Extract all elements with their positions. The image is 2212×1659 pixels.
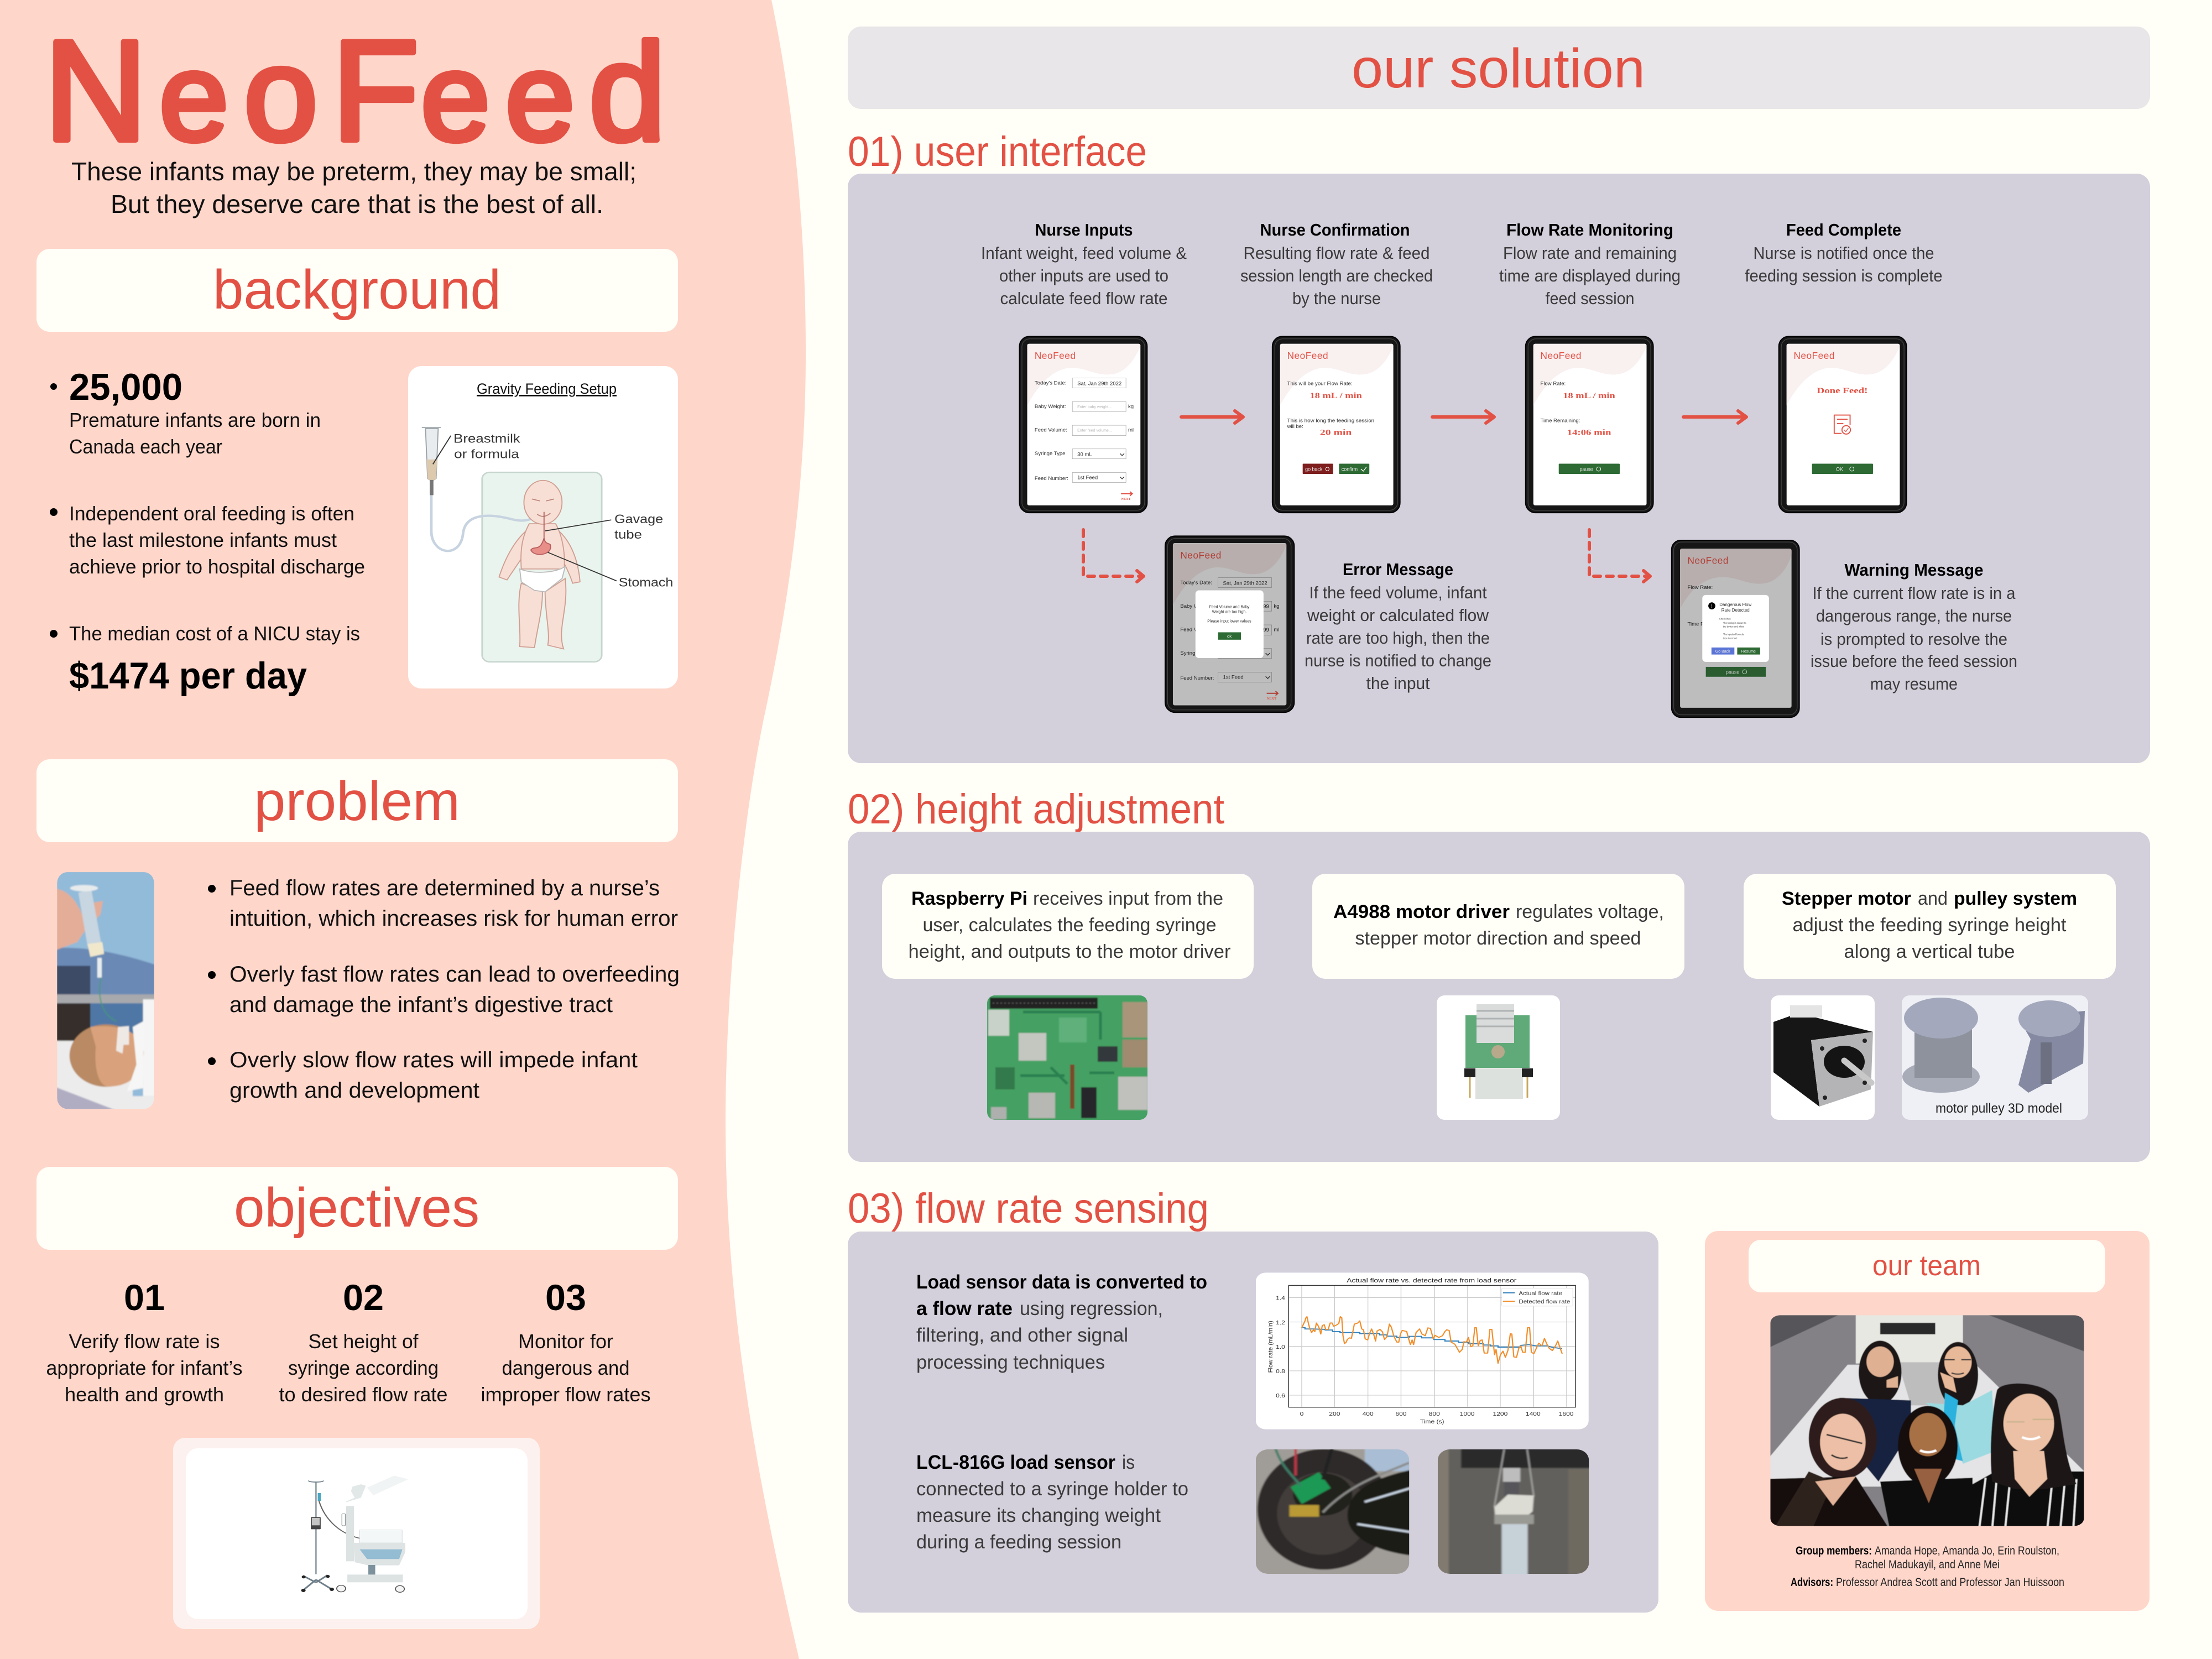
text: load sensor data xyxy=(916,1271,1207,1373)
panel: background bullets: Independent oral feeding is often xyxy=(69,502,354,525)
tablet: warning message: Go Back xyxy=(1715,650,1730,654)
tablet: nurse inputs: 30 mL xyxy=(1077,452,1092,458)
photo: syringe holder xyxy=(1434,1446,1592,1577)
panel: gravity feeding setup diagram: Gavage xyxy=(614,513,663,526)
card: raspberry pi: height, and outputs to the motor driver xyxy=(908,941,1231,962)
text: warning message: is prompted to resolve the xyxy=(1820,629,2007,649)
chart: actual vs detected flow rate xyxy=(1256,1272,1589,1430)
tablet: error message: Feed Volume and Baby xyxy=(1209,605,1250,609)
text: load sensor hardware: LCL-816G load sensor xyxy=(916,1452,1115,1473)
title: NeoFeed: N xyxy=(44,11,147,170)
tablet: error message: Today's Date: xyxy=(1180,580,1212,586)
card: motor driver xyxy=(1312,874,1684,979)
text: error message: weight or calculated flow xyxy=(1307,606,1489,625)
chart: actual vs detected flow rate: 1000 xyxy=(1460,1411,1475,1417)
panel: gravity feeding setup diagram: Breastmilk xyxy=(453,432,520,446)
image: motor pulley 3D model: motor pulley 3D model xyxy=(1936,1101,2062,1116)
step text: nurse inputs: other inputs are used to xyxy=(999,266,1168,285)
tablet: error message: 99 xyxy=(1263,603,1269,609)
text: load sensor data: filtering, and other signal xyxy=(916,1324,1128,1346)
tablet: error message: ml xyxy=(1274,627,1279,633)
panel: problem bullets: Overly slow flow rates will impede infant xyxy=(229,1048,638,1072)
arrow: monitoring to complete xyxy=(1683,411,1746,423)
tablet: error message: Baby W xyxy=(1180,603,1199,609)
tablet: nurse confirmation: will be: xyxy=(1287,424,1303,430)
panel: background bullets xyxy=(50,366,365,697)
tablet: warning message: The inputted formula xyxy=(1723,633,1744,636)
tablet: error message: Feed Number: xyxy=(1180,675,1214,681)
tablet: error message: ok xyxy=(1227,634,1232,639)
text: load sensor hardware: during a feeding session xyxy=(916,1531,1121,1553)
objective 03: 03 xyxy=(545,1277,586,1318)
chart: actual vs detected flow rate: 800 xyxy=(1429,1411,1440,1417)
title: NeoFeed: o xyxy=(244,20,317,168)
tablet: feed complete: NeoFeed xyxy=(1793,350,1834,361)
step text: nurse inputs: Infant weight, feed volume & xyxy=(981,243,1187,263)
objective 03: dangerous and xyxy=(502,1357,629,1379)
chart: actual vs detected flow rate: Time (s) xyxy=(1420,1419,1444,1425)
objective 03: Monitor for xyxy=(518,1330,613,1353)
tablet: warning message: NeoFeed xyxy=(1687,555,1728,566)
tablet: nurse inputs xyxy=(1020,336,1147,513)
tablet: nurse confirmation: This is how long the feeding session xyxy=(1287,418,1374,424)
arrow: confirmation to monitoring xyxy=(1432,411,1494,423)
arrow: inputs to confirmation xyxy=(1181,411,1243,423)
text: warning message: Warning Message xyxy=(1845,560,1983,580)
step text: flow rate monitoring: feed session xyxy=(1545,289,1635,308)
tablet: error message: 99 xyxy=(1263,627,1269,633)
tablet: nurse confirmation: This will be your Flow Rate: xyxy=(1287,380,1353,387)
objective 02 xyxy=(279,1277,448,1406)
objective 01: 01 xyxy=(124,1277,165,1318)
card: stepper motor: Stepper motor xyxy=(1782,888,1911,909)
objective 01: health and growth xyxy=(65,1383,224,1406)
tablet: nurse inputs: Today's Date: xyxy=(1035,380,1066,387)
text: warning message: issue before the feed session xyxy=(1811,651,2017,671)
text: credits: Amanda Hope, Amanda Jo, Erin Roulston, xyxy=(1875,1545,2059,1557)
tablet: warning message: type is correct xyxy=(1723,637,1738,640)
card: stepper motor: pulley system xyxy=(1954,888,2077,909)
text: error message: nurse is notified to change xyxy=(1305,651,1491,670)
tablet: error message: Feed V xyxy=(1180,627,1198,633)
card: motor driver: regulates voltage, xyxy=(1516,901,1664,922)
tagline xyxy=(71,157,637,218)
text: credits: Rachel Madukayil, and Anne Mei xyxy=(1855,1558,2000,1571)
step text: flow rate monitoring: Flow Rate Monitoring xyxy=(1506,220,1673,239)
tablet: warning message: Rate Detected xyxy=(1721,608,1750,613)
panel: background bullets: Premature infants are born in xyxy=(69,409,321,431)
tablet: error message: Syring xyxy=(1180,650,1195,656)
objective 01: appropriate for infant’s xyxy=(46,1357,242,1379)
text: load sensor hardware: measure its changing weight xyxy=(916,1505,1161,1526)
panel: gravity feeding setup diagram: Stomach xyxy=(619,576,673,589)
tablet: feed complete: Done Feed! xyxy=(1817,387,1867,395)
tablet: flow rate monitoring xyxy=(1526,336,1653,513)
tablet: nurse confirmation xyxy=(1272,336,1400,513)
step text: nurse confirmation: session length are checked xyxy=(1240,266,1433,285)
tablet: flow rate monitoring: 14:06 min xyxy=(1567,428,1611,437)
tablet: error message: Please input lower values xyxy=(1207,620,1251,624)
subheading: 02 height adjustment: 02) height adjustment xyxy=(848,786,1224,833)
panel: gravity feeding setup diagram: or formula xyxy=(454,447,520,461)
panel: gravity feeding setup diagram: Gravity Feeding Setup xyxy=(477,380,617,397)
panel: gravity feeding setup diagram xyxy=(408,366,678,688)
card: stepper motor: adjust the feeding syringe height xyxy=(1793,915,2067,936)
chart: actual vs detected flow rate: 600 xyxy=(1395,1411,1407,1417)
panel: background bullets: achieve prior to hospital discharge xyxy=(69,555,365,578)
tablet: nurse inputs: kg xyxy=(1128,404,1134,410)
panel: background bullets: the last milestone infants must xyxy=(69,529,337,551)
tablet: feed complete: OK xyxy=(1836,466,1843,472)
tablet: nurse confirmation: go back xyxy=(1305,466,1323,472)
card: stepper motor xyxy=(1744,874,2116,979)
step text: nurse confirmation: by the nurse xyxy=(1292,289,1381,308)
step text: nurse inputs: calculate feed flow rate xyxy=(1000,289,1168,308)
objective 02: 02 xyxy=(343,1277,384,1318)
tablet: error message: NeoFeed xyxy=(1180,550,1221,561)
tablet: nurse confirmation: 20 min xyxy=(1320,428,1352,437)
heading: our team: our team xyxy=(1872,1250,1981,1282)
tablet: warning message: The tubing is secure to xyxy=(1723,622,1746,624)
dashed arrow: to error message xyxy=(1083,530,1144,582)
tablet: error message: Weight are too high. xyxy=(1212,610,1246,614)
tablet: error message: kg xyxy=(1274,603,1279,609)
tablet: warning message: Dangerous Flow xyxy=(1719,602,1751,607)
text: credits xyxy=(1791,1545,2064,1589)
panel: problem bullets: growth and development xyxy=(229,1078,479,1103)
step text: feed complete: feeding session is complete xyxy=(1745,266,1942,285)
card: raspberry pi xyxy=(882,874,1254,979)
step text: nurse confirmation xyxy=(1240,220,1433,308)
text: error message: If the feed volume, infant xyxy=(1310,583,1487,602)
chart: actual vs detected flow rate: 0.6 xyxy=(1276,1393,1285,1399)
title: NeoFeed: F xyxy=(332,11,419,170)
image: stepper motor xyxy=(1771,995,1875,1120)
chart: actual vs detected flow rate: 0 xyxy=(1300,1411,1303,1417)
heading: our solution: our solution xyxy=(1352,38,1645,100)
tagline: But they deserve care that is the best of all. xyxy=(111,190,603,218)
tablet: flow rate monitoring: Time Remaining: xyxy=(1541,418,1580,424)
panel: problem bullets: Feed flow rates are determined by a nurse’s xyxy=(229,876,660,900)
subheading: 01 user interface: 01) user interface xyxy=(848,128,1147,175)
image: A4988 motor driver xyxy=(1437,995,1560,1120)
tablet: warning message xyxy=(1672,540,1799,717)
panel: gravity feeding setup diagram: tube xyxy=(614,528,642,541)
panel: background bullets: 25,000 xyxy=(69,366,182,408)
tablet: error message: Sat, Jan 29th 2022 xyxy=(1223,580,1267,586)
heading: our team xyxy=(1749,1240,2105,1292)
step text: flow rate monitoring xyxy=(1499,220,1681,308)
text: credits: Professor Andrea Scott and Professor Jan Huissoon xyxy=(1836,1576,2064,1589)
panel: incubator image card xyxy=(173,1438,540,1629)
tablet: warning message: Flow Rate: xyxy=(1687,585,1713,591)
panel: user interface xyxy=(848,174,2150,763)
tablet: error message xyxy=(1165,536,1294,712)
text: load sensor data: Load sensor data is converted to xyxy=(916,1271,1207,1293)
tablet: warning message: ! xyxy=(1711,603,1713,609)
subheading: 03 flow rate sensing: 03) flow rate sensing xyxy=(848,1185,1209,1232)
chart: actual vs detected flow rate: 400 xyxy=(1363,1411,1374,1417)
text: credits: Advisors: xyxy=(1791,1576,1833,1589)
panel: our team xyxy=(1705,1231,2150,1611)
photo: load sensor circuit xyxy=(1256,1449,1409,1574)
chart: actual vs detected flow rate: Actual flow rate vs. detected rate from load sensor xyxy=(1347,1277,1516,1284)
panel: problem bullets: intuition, which increases risk for human error xyxy=(229,906,678,931)
step text: nurse confirmation: Resulting flow rate & feed xyxy=(1243,243,1430,263)
card: stepper motor: and xyxy=(1918,888,1948,909)
title: NeoFeed: e xyxy=(505,27,575,166)
photo: team xyxy=(1765,1312,2089,1530)
text: load sensor data: processing techniques xyxy=(916,1352,1105,1373)
title: NeoFeed: e xyxy=(421,27,490,166)
left pink curved panel xyxy=(0,0,806,1659)
panel: background bullets: Canada each year xyxy=(69,435,222,458)
objective 03: improper flow rates xyxy=(481,1383,650,1406)
text: load sensor hardware: connected to a syringe holder to xyxy=(916,1478,1188,1500)
text: error message xyxy=(1305,560,1491,693)
tablet: nurse inputs: Feed Number: xyxy=(1035,476,1068,482)
chart: actual vs detected flow rate: 1400 xyxy=(1526,1411,1541,1417)
tagline: These infants may be preterm, they may be small; xyxy=(71,157,637,186)
step text: nurse confirmation: Nurse Confirmation xyxy=(1260,220,1410,239)
text: load sensor hardware xyxy=(916,1452,1188,1553)
text: load sensor data: using regression, xyxy=(1020,1298,1163,1319)
card: raspberry pi: Raspberry Pi xyxy=(911,888,1027,909)
card: stepper motor: along a vertical tube xyxy=(1844,941,2015,962)
card: motor driver: A4988 motor driver xyxy=(1333,901,1510,922)
objective 01 xyxy=(46,1277,242,1406)
step text: nurse inputs xyxy=(981,220,1187,308)
tablet: nurse inputs: Sat, Jan 29th 2022 xyxy=(1077,380,1121,387)
tablet: nurse inputs: NEXT xyxy=(1121,497,1131,501)
objective 03 xyxy=(481,1277,650,1406)
text: error message: rate are too high, then the xyxy=(1306,628,1490,648)
tablet: nurse inputs: Syringe Type xyxy=(1035,451,1065,457)
text: credits: Group members: xyxy=(1796,1545,1872,1557)
objective 02: to desired flow rate xyxy=(279,1383,448,1406)
text: load sensor data: a flow rate xyxy=(916,1298,1013,1319)
tablets xyxy=(1020,336,1907,717)
dashed arrow: to warning message xyxy=(1589,530,1650,582)
step text: feed complete: Feed Complete xyxy=(1786,220,1901,239)
tablet: flow rate monitoring: 18 mL / min xyxy=(1563,392,1615,400)
heading: problem xyxy=(36,759,678,842)
heading: background: background xyxy=(213,259,501,321)
photo: syringe feeding of infant xyxy=(57,872,154,1109)
image: motor pulley 3D model xyxy=(1902,995,2088,1120)
tablet: error message: NEXT xyxy=(1267,697,1277,701)
tablet: nurse confirmation: NeoFeed xyxy=(1287,350,1328,361)
tablet: nurse confirmation: 18 mL / min xyxy=(1310,392,1362,400)
objective 02: Set height of xyxy=(309,1330,419,1353)
tablet: error message: 1st Feed xyxy=(1223,675,1244,681)
tablet: flow rate monitoring: Flow Rate: xyxy=(1541,380,1566,387)
text: error message: the input xyxy=(1366,674,1430,693)
panel: problem bullets: Overly fast flow rates can lead to overfeeding xyxy=(229,962,680,987)
card: raspberry pi: user, calculates the feeding syringe xyxy=(922,915,1217,936)
tablet: warning message: the device and infant xyxy=(1723,625,1745,628)
objective 01: Verify flow rate is xyxy=(69,1330,220,1353)
tablet: flow rate monitoring: pause xyxy=(1579,466,1593,472)
text: warning message: If the current flow rate is in a xyxy=(1813,583,2016,603)
tablet: nurse inputs: Enter baby weight... xyxy=(1077,405,1112,409)
chart: actual vs detected flow rate: 1600 xyxy=(1559,1411,1574,1417)
heading: objectives: objectives xyxy=(234,1177,479,1239)
tablet: nurse inputs: NeoFeed xyxy=(1035,350,1076,361)
text: error message: Error Message xyxy=(1343,560,1453,579)
panel: background bullets: $1474 per day xyxy=(69,655,307,697)
step text: flow rate monitoring: Flow rate and remaining xyxy=(1503,243,1677,263)
panel: flow rate sensing xyxy=(848,1232,1658,1613)
step text: nurse inputs: Nurse Inputs xyxy=(1035,220,1133,239)
step text: feed complete xyxy=(1745,220,1942,285)
chart: actual vs detected flow rate: Detected flow rate xyxy=(1519,1299,1570,1305)
tablet: warning message: Check that: xyxy=(1719,617,1731,620)
chart: actual vs detected flow rate: 1.0 xyxy=(1276,1344,1285,1350)
heading: background xyxy=(36,249,678,332)
panel: background bullets: The median cost of a NICU stay is xyxy=(69,622,360,645)
tablet: nurse inputs: Feed Volume: xyxy=(1035,427,1067,434)
tablet: feed complete xyxy=(1779,336,1907,513)
tablet: nurse inputs: Baby Weight: xyxy=(1035,404,1066,410)
text: warning message xyxy=(1811,560,2017,693)
chart: actual vs detected flow rate: 1200 xyxy=(1493,1411,1507,1417)
panel: problem bullets xyxy=(208,876,680,1103)
text: warning message: dangerous range, the nurse xyxy=(1816,606,2012,625)
panel: height adjustment xyxy=(848,832,2150,1162)
image: raspberry pi board xyxy=(984,993,1150,1123)
card: motor driver: stepper motor direction and speed xyxy=(1355,928,1641,949)
tablet: nurse inputs: ml xyxy=(1128,427,1134,434)
title: NeoFeed: e xyxy=(159,27,228,166)
heading: objectives xyxy=(36,1167,678,1250)
tablet: nurse inputs: 1st Feed xyxy=(1077,475,1098,481)
tablet: flow rate monitoring: NeoFeed xyxy=(1541,350,1582,361)
chart: actual vs detected flow rate: 0.8 xyxy=(1276,1369,1285,1375)
chart: actual vs detected flow rate: 1.4 xyxy=(1276,1295,1285,1302)
tablet: nurse confirmation: confirm xyxy=(1342,466,1358,472)
tablet: warning message: Time F xyxy=(1687,621,1704,627)
step text: feed complete: Nurse is notified once the xyxy=(1753,243,1934,263)
text: load sensor hardware: is xyxy=(1122,1452,1135,1473)
chart: actual vs detected flow rate: Actual flow rate xyxy=(1519,1291,1562,1297)
title: NeoFeed: d xyxy=(589,15,666,169)
text: warning message: may resume xyxy=(1870,674,1958,693)
chart: actual vs detected flow rate: 200 xyxy=(1329,1411,1340,1417)
tablet: warning message: pause xyxy=(1726,670,1739,675)
chart: actual vs detected flow rate: 1.2 xyxy=(1276,1319,1285,1326)
chart: actual vs detected flow rate: Flow rate (mL/min) xyxy=(1267,1321,1274,1373)
card: raspberry pi: receives input from the xyxy=(1033,888,1223,909)
tablet: warning message: Resume xyxy=(1741,650,1756,654)
panel: problem bullets: and damage the infant’s digestive tract xyxy=(229,993,613,1017)
heading: problem: problem xyxy=(254,770,460,832)
step text: flow rate monitoring: time are displayed during xyxy=(1499,266,1681,285)
tablet: nurse inputs: Enter feed volume... xyxy=(1077,429,1112,433)
objective 02: syringe according xyxy=(288,1357,439,1379)
heading: our solution xyxy=(848,27,2150,109)
